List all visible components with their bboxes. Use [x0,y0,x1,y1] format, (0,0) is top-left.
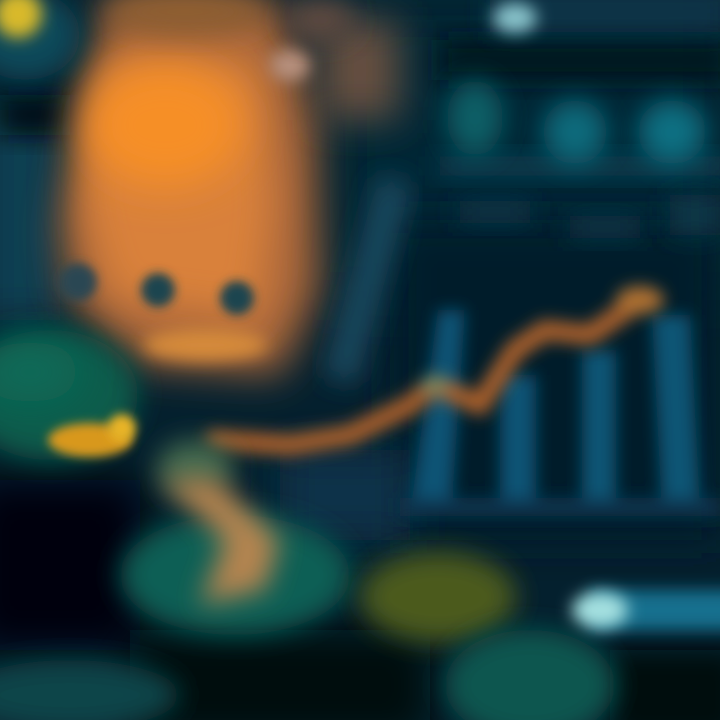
panel: top right dashboard [340,0,720,380]
icon: three dots [59,263,254,315]
panel: left green bowl [0,330,138,460]
bar chart [400,310,720,516]
line chart: orange trend [215,286,664,445]
bright bar bottom right [572,590,720,630]
panel: bottom centre green bowl [120,440,350,635]
icon: top-left corner badge [0,0,80,80]
panel: bottom green shapes [0,630,615,720]
panel: olive bowl [360,552,516,642]
panel: orange figure [59,0,400,375]
